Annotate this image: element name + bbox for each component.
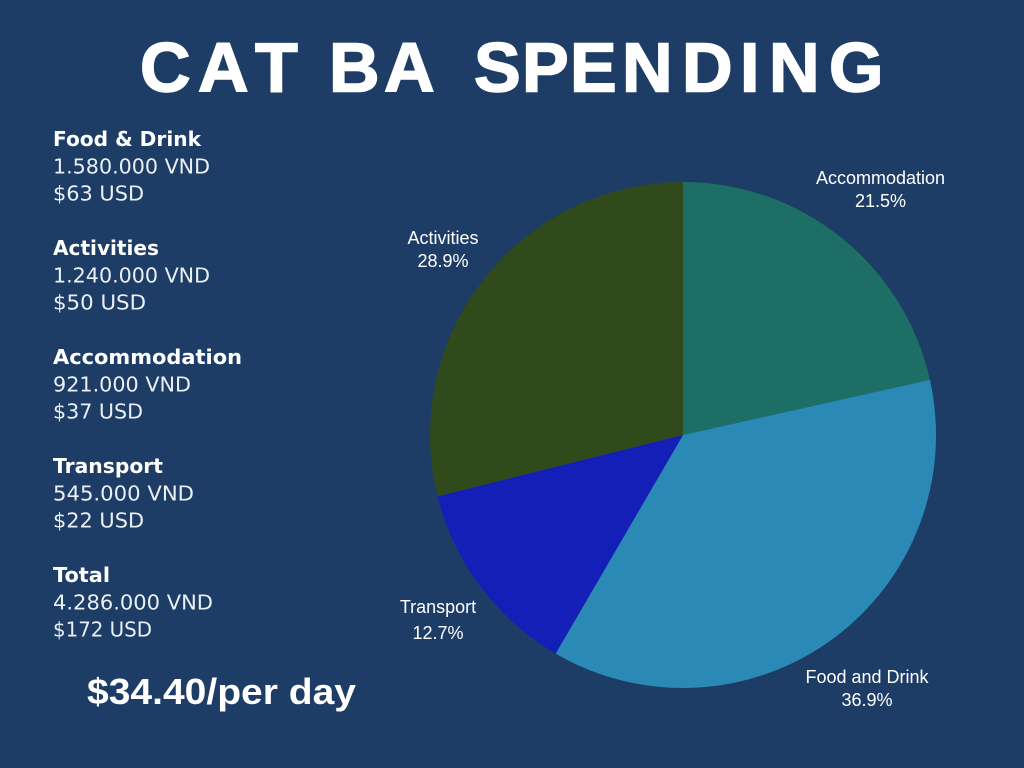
label: transport: 12.7%	[412, 623, 464, 643]
text block: total	[53, 563, 213, 642]
text block: activities: Activities	[53, 236, 159, 260]
text block: total: 4.286.000 VND	[53, 590, 213, 614]
text block: transport: $22 USD	[53, 508, 144, 532]
text block: accommodation: $37 USD	[53, 400, 143, 424]
text block: food and drink: Food & Drink	[53, 127, 202, 151]
slice: activities	[430, 182, 683, 496]
text block: transport: Transport	[53, 454, 163, 478]
text block: accommodation	[53, 345, 242, 424]
label: activities: 28.9%	[417, 251, 469, 271]
label: food and drink: 36.9%	[841, 690, 893, 710]
text block: food and drink: 1.580.000 VND	[53, 154, 210, 178]
slice: transport	[438, 435, 683, 654]
label: transport	[400, 597, 476, 643]
label: food and drink: Food and Drink	[805, 667, 930, 687]
title: CAT BA SPENDING	[140, 28, 883, 106]
label: accommodation: 21.5%	[855, 191, 906, 211]
text block: accommodation: 921.000 VND	[53, 372, 191, 396]
label: food and drink	[805, 667, 930, 710]
text block: food and drink: $63 USD	[53, 182, 144, 206]
label: accommodation	[816, 168, 945, 211]
label: transport: Transport	[400, 597, 476, 617]
text block: activities: $50 USD	[53, 290, 146, 314]
pie chart	[430, 182, 936, 688]
slice: food and drink	[556, 380, 936, 688]
text block: total: Total	[53, 563, 110, 587]
text block: total: $172 USD	[53, 618, 152, 642]
label: activities: Activities	[407, 228, 479, 248]
text block: activities	[53, 236, 210, 314]
label: activities	[407, 228, 479, 271]
text block: accommodation: Accommodation	[53, 345, 242, 369]
text block: activities: 1.240.000 VND	[53, 264, 210, 288]
callout: per day cost: $34.40/per day	[87, 671, 356, 712]
text block: transport: 545.000 VND	[53, 482, 194, 506]
text block: transport	[53, 454, 194, 532]
text block: food and drink	[53, 127, 210, 206]
label: accommodation: Accommodation	[816, 168, 945, 188]
panel: spending list	[53, 127, 242, 642]
slice: accommodation	[683, 182, 930, 435]
